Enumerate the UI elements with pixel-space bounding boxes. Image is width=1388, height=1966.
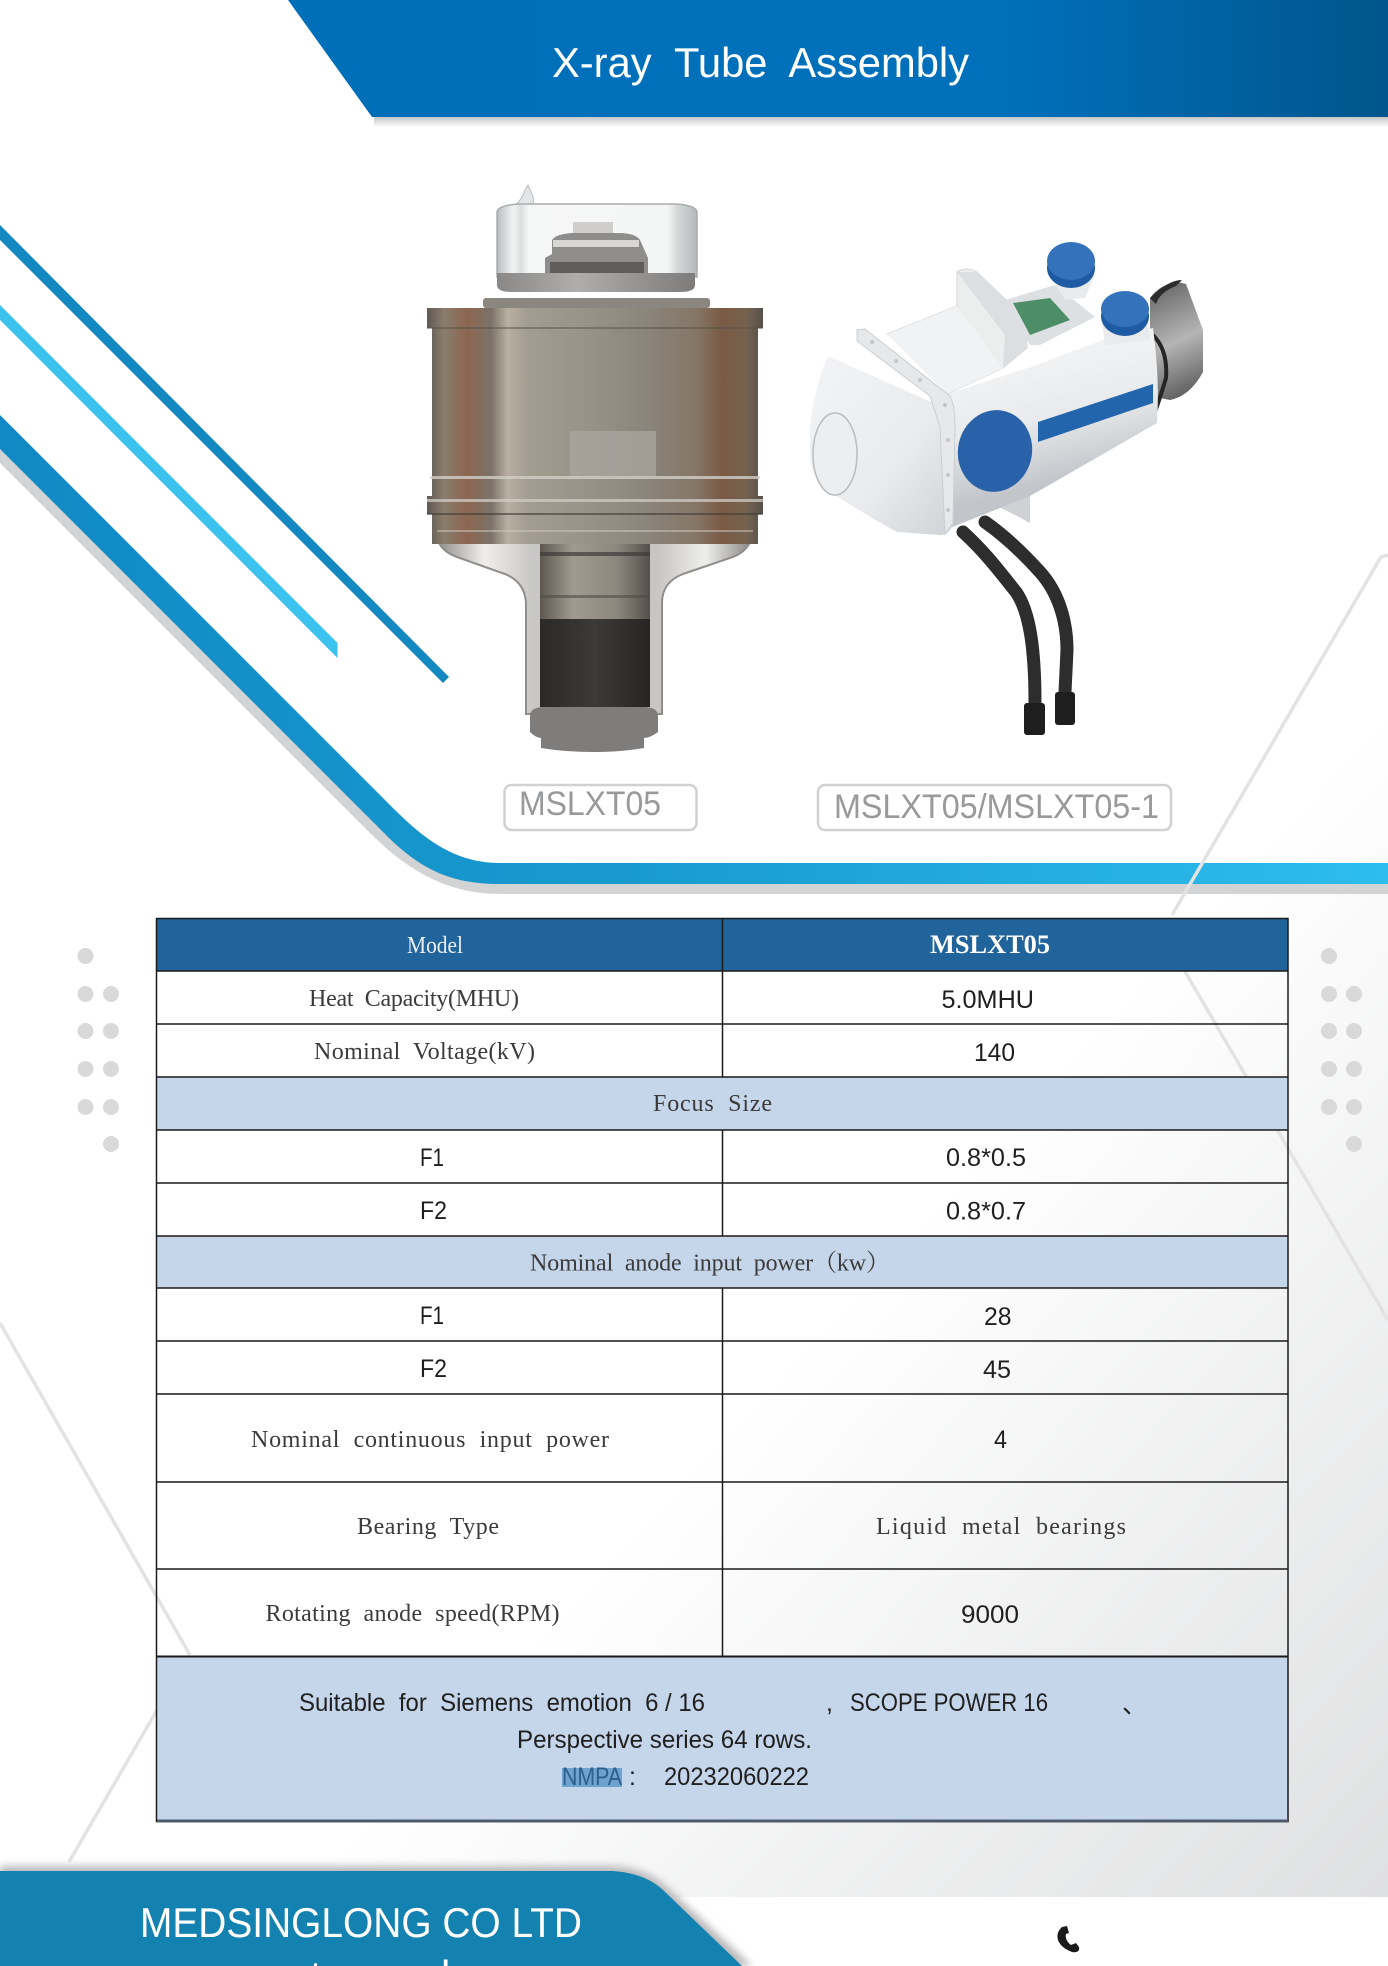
suitability note: 20232060222 — [664, 1763, 809, 1791]
glass tip — [514, 185, 534, 206]
row: nominal voltage: 140 — [974, 1039, 1015, 1067]
specification table — [156, 918, 1288, 1822]
suitability note: , — [826, 1689, 833, 1717]
row: nominal continuous input power — [251, 1426, 1007, 1454]
cable end right — [1055, 692, 1075, 725]
glass cap — [497, 204, 697, 277]
dots right — [1321, 948, 1362, 1152]
dome circle — [813, 413, 857, 495]
table header row: MSLXT05 — [930, 930, 1050, 959]
suitability note: Suitable for Siemens emotion 6 / 16 — [299, 1689, 705, 1717]
row: focus F2 — [420, 1197, 1026, 1226]
title: X-ray Tube Assembly — [552, 39, 969, 86]
row: nominal voltage — [314, 1039, 1015, 1067]
table header row: Model — [407, 933, 463, 959]
suitability note — [299, 1689, 1147, 1791]
suitability note: SCOPE POWER 16 — [850, 1689, 1048, 1717]
row: power F1: F1 — [420, 1302, 444, 1330]
suitability note: Perspective series 64 rows. — [517, 1726, 812, 1754]
row: nominal voltage: Nominal Voltage(kV) — [314, 1039, 535, 1065]
cap base disc — [497, 273, 695, 292]
blue cap 2 — [1101, 291, 1150, 345]
glass bowl and neck — [437, 535, 752, 714]
suitability note: 、 — [1122, 1691, 1147, 1719]
cathode insulator — [545, 222, 648, 273]
row: bearing type: Bearing Type — [357, 1514, 499, 1540]
rotor sleeve — [540, 544, 650, 619]
model label: MSLXT05/MSLXT05-1: MSLXT05/MSLXT05-1 — [834, 788, 1159, 826]
row: rotating anode speed: Rotating anode speed(RPM) — [266, 1601, 560, 1627]
suitability note: : — [629, 1763, 636, 1791]
row: nominal continuous input power: Nominal continuous input power — [251, 1427, 609, 1453]
flange bolts — [870, 340, 950, 512]
row: focus F1: 0.8*0.5 — [946, 1144, 1026, 1172]
open tray — [887, 269, 1027, 394]
circuit plate — [1005, 285, 1095, 345]
side blue disc — [950, 403, 1040, 499]
table grid lines — [156, 918, 1288, 1822]
row: rotating anode speed — [266, 1601, 1019, 1629]
footer banner — [0, 1866, 752, 1966]
blue stripe — [1038, 384, 1153, 442]
model label: MSLXT05: MSLXT05 — [519, 785, 661, 823]
section: focus size: Focus Size — [653, 1091, 772, 1117]
row: focus F2: F2 — [420, 1197, 447, 1225]
tube base — [530, 707, 658, 752]
row: power F2: F2 — [420, 1355, 447, 1383]
row: power F1: 28 — [984, 1303, 1012, 1331]
section: nominal anode input power: Nominal anode input power（kw） — [530, 1250, 890, 1276]
blue cap 1 — [1047, 242, 1095, 300]
cylinder body — [947, 328, 1158, 528]
decorative diagonal stripe: light blue — [0, 305, 338, 658]
lower mount — [997, 484, 1030, 523]
row: focus F1: F1 — [420, 1144, 444, 1172]
suitability note: NMPA — [562, 1763, 622, 1791]
header banner — [288, 0, 1388, 127]
metal body — [432, 308, 758, 544]
row: heat capacity: 5.0MHU — [942, 986, 1034, 1014]
table header row — [157, 919, 1288, 971]
row: heat capacity: Heat Capacity(MHU) — [309, 986, 519, 1012]
row: power F1 — [420, 1302, 1012, 1331]
product image: X-ray tube insert — [427, 185, 763, 752]
product image: tube housing assembly — [810, 242, 1203, 735]
row: bearing type: Liquid metal bearings — [876, 1514, 1126, 1540]
row: focus F1 — [420, 1144, 1026, 1172]
row: heat capacity — [309, 986, 1034, 1014]
row: rotating anode speed: 9000 — [961, 1601, 1019, 1629]
row: power F2 — [420, 1355, 1011, 1384]
icon: phone — [1057, 1926, 1079, 1952]
row: nominal continuous input power: 4 — [994, 1426, 1007, 1454]
row: focus F2: 0.8*0.7 — [946, 1198, 1026, 1226]
flange strip — [857, 329, 955, 534]
company name: MEDSINGLONG CO LTD — [140, 1899, 582, 1946]
row shading: section bands — [157, 1077, 1288, 1821]
dark rotor — [540, 619, 650, 707]
swoosh divider — [0, 415, 1388, 894]
model label: MSLXT05 — [504, 785, 696, 830]
background light geometric lines — [0, 555, 1388, 1862]
right collar — [1150, 282, 1203, 400]
front dome — [810, 356, 953, 535]
footer white strip — [600, 1897, 1388, 1966]
dots left — [78, 948, 119, 1152]
cooling cables — [963, 522, 1067, 703]
circuit board — [1013, 298, 1070, 335]
row: power F2: 45 — [983, 1356, 1011, 1384]
cable end left — [1024, 703, 1045, 735]
decorative diagonal stripe: dark blue — [0, 225, 449, 683]
row: bearing type — [357, 1514, 1126, 1540]
